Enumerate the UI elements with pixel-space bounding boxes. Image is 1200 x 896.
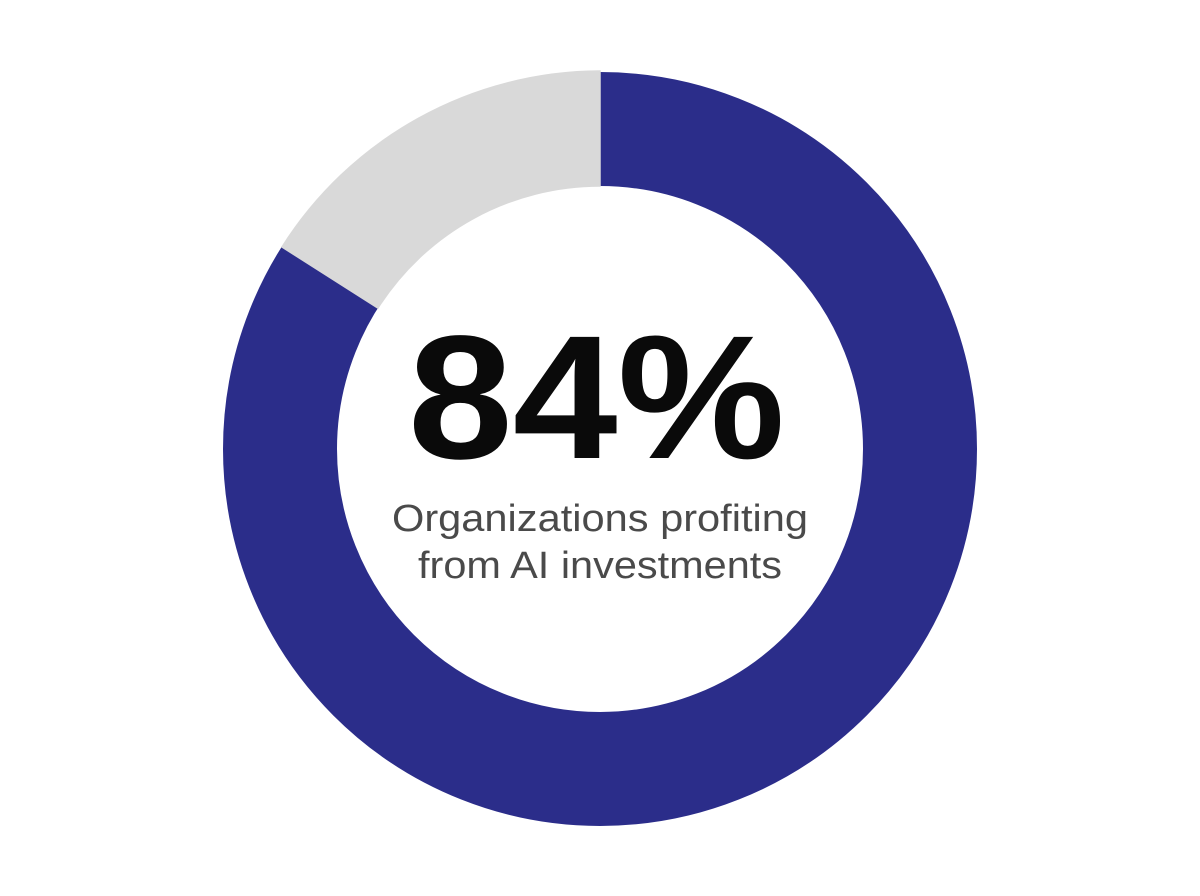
- big percentage value: 84%: [408, 300, 785, 496]
- caption text: [392, 498, 808, 587]
- caption text: from AI investments: [418, 545, 782, 587]
- donut chart: [280, 71, 920, 769]
- caption text: Organizations profiting: [392, 498, 808, 540]
- segment: 16% remainder (gray): [282, 71, 600, 308]
- segment: 84% profiting (blue): [280, 129, 920, 769]
